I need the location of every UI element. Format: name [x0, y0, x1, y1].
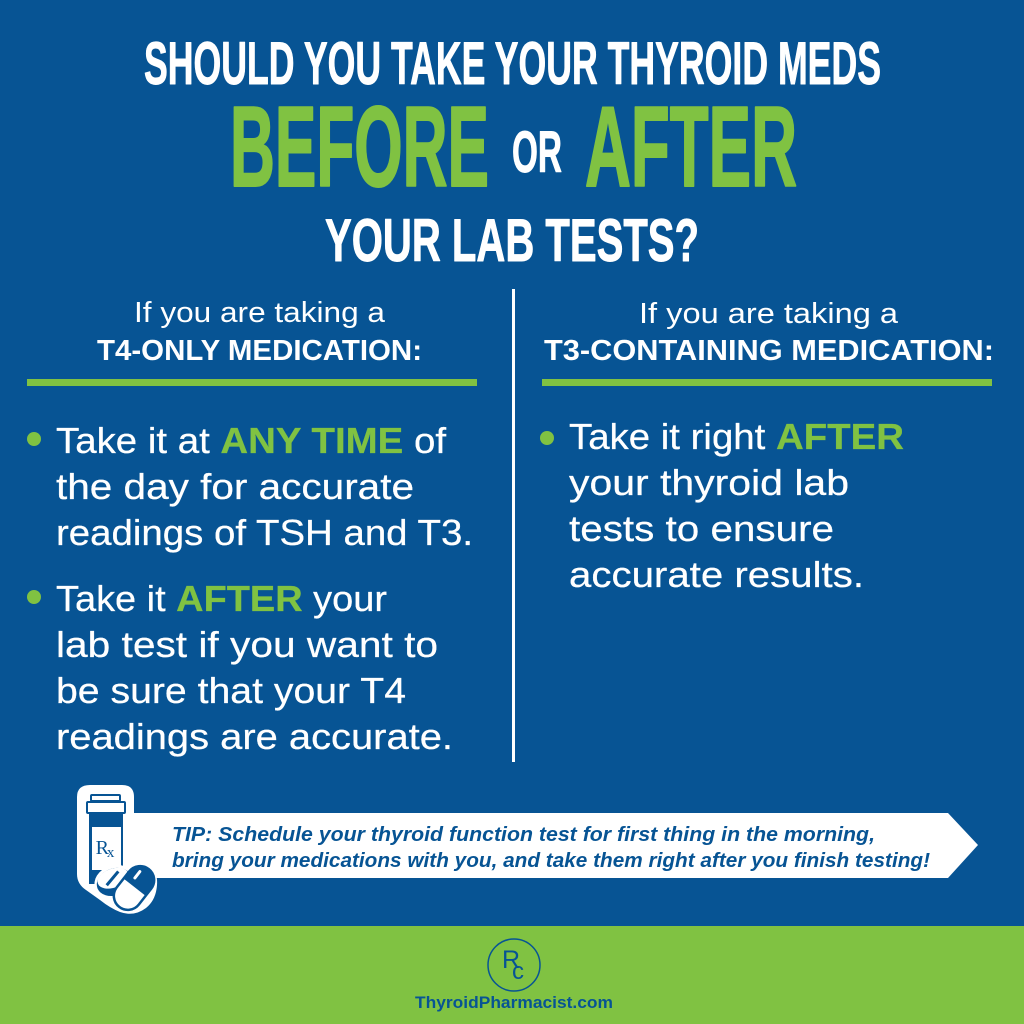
bullet: right after: tests to ensure [569, 508, 834, 549]
heading: T4-only: T4-ONLY MEDICATION: [97, 335, 422, 367]
title: BEFORE [230, 84, 489, 211]
title: YOUR LAB TESTS? [325, 207, 699, 274]
title [144, 30, 881, 274]
bullet: any time [27, 420, 473, 553]
bullet: right after [540, 416, 904, 595]
bullet: after lab test: Take it AFTER your [56, 578, 387, 619]
heading: T4-only [27, 297, 477, 386]
bullet: after lab test [27, 578, 453, 757]
heading: T4-only: If you are taking a [134, 297, 386, 329]
logo: RC monogram: R [502, 946, 520, 974]
bullet: after lab test: lab test if you want to [56, 624, 438, 665]
tip callout [130, 813, 978, 878]
panel: T3-containing medication [540, 298, 994, 595]
panel: T4-only medication [27, 297, 477, 757]
logo: RC monogram [488, 939, 540, 991]
tip callout: bring your medications with you, and take them right after you finish testing! [172, 849, 930, 872]
icon: prescription bottle and pills [77, 785, 160, 916]
heading: T3-containing [542, 298, 994, 386]
heading: T3-containing: T3-CONTAINING MEDICATION: [544, 335, 994, 367]
title: OR [512, 120, 562, 185]
bullet: after lab test: readings are accurate. [56, 716, 453, 757]
tip callout: TIP: Schedule your thyroid function test for first thing in the morning, [172, 823, 875, 846]
title: AFTER [585, 84, 797, 211]
footer band [0, 926, 1024, 1024]
bullet: after lab test: be sure that your T4 [56, 670, 406, 711]
bullet: any time: readings of TSH and T3. [56, 512, 473, 553]
bullet: right after: Take it right AFTER [569, 416, 904, 457]
bullet: right after: your thyroid lab [569, 462, 849, 503]
heading: T3-containing: If you are taking a [639, 298, 899, 330]
website: ThyroidPharmacist.com [415, 993, 613, 1012]
bullet: any time: the day for accurate [56, 466, 414, 507]
bullet: right after: accurate results. [569, 554, 864, 595]
logo: RC monogram: c [512, 958, 524, 985]
icon: prescription bottle and pills: R [96, 837, 109, 859]
bullet: any time: Take it at ANY TIME of [56, 420, 447, 461]
icon: prescription bottle and pills: x [107, 845, 115, 861]
